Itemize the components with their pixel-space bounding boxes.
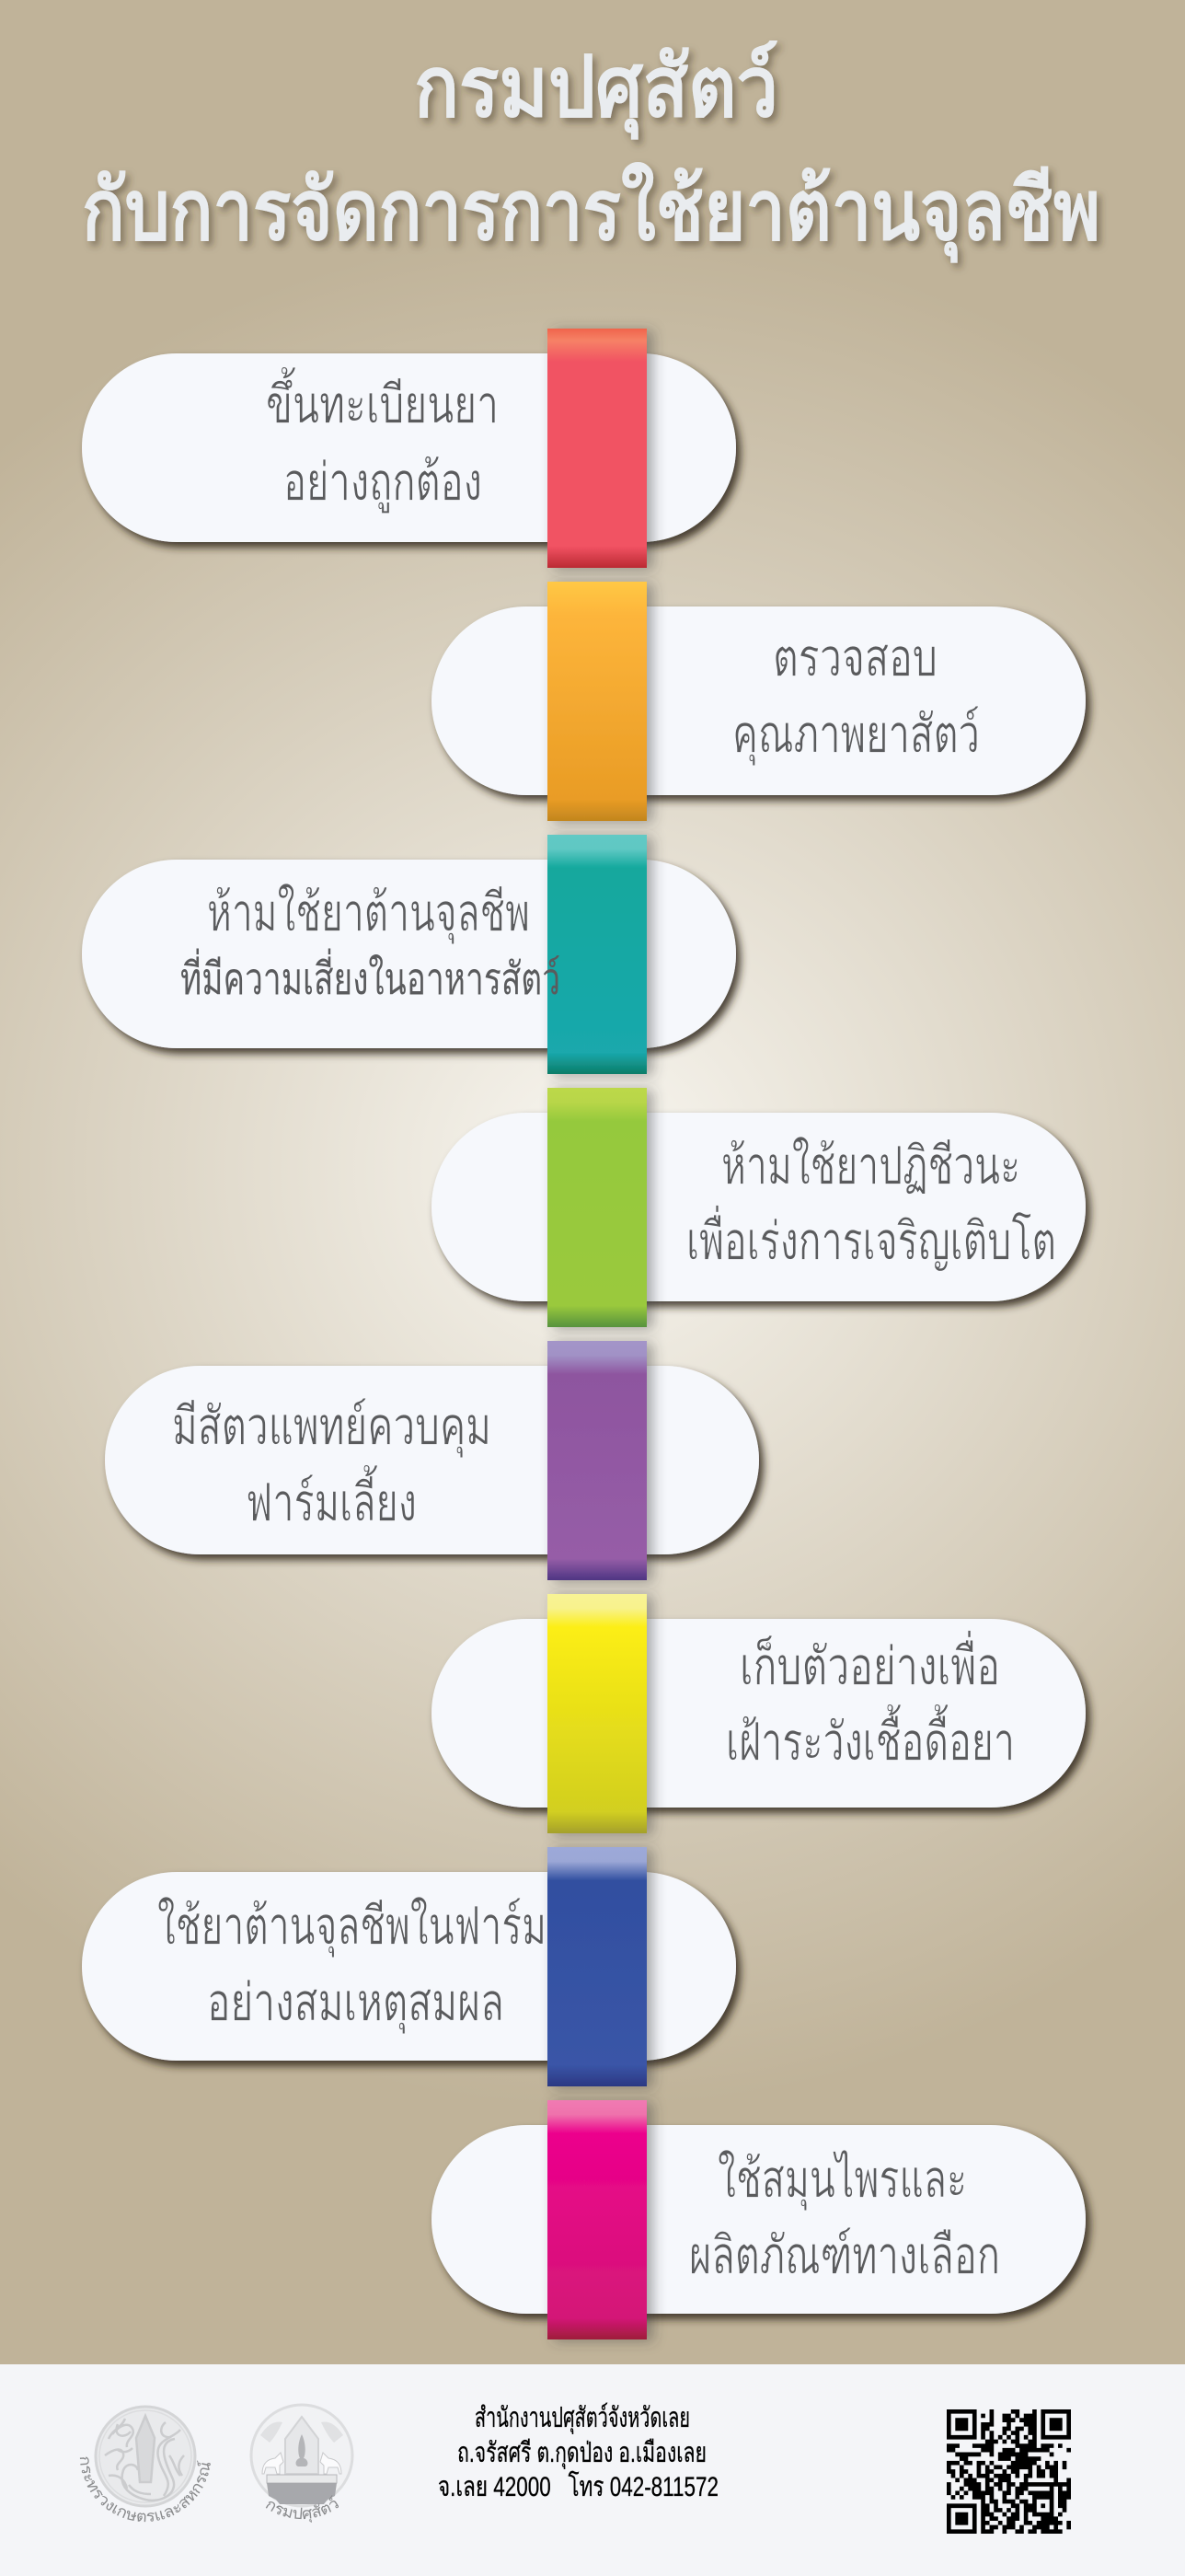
label 8: ใช้สมุนไพรและ — [718, 2149, 967, 2212]
QR code — [947, 2411, 1071, 2532]
colour bar 2 — [547, 582, 647, 821]
step 6: resistance surveillance — [431, 1594, 1086, 1833]
colour bar 4 — [547, 1088, 647, 1327]
title — [82, 40, 1100, 263]
label 6: เก็บตัวอย่างเพื่อ — [740, 1630, 1000, 1696]
footer panel — [0, 2364, 1185, 2576]
label 4: เพื่อเร่งการเจริญเติบโต — [686, 1205, 1056, 1271]
label 1 — [266, 367, 499, 514]
address text block: ถ.จรัสศรี ต.กุดป่อง อ.เมืองเลย — [457, 2438, 707, 2470]
colour bar 6 — [547, 1594, 647, 1833]
colour bar 3 — [547, 835, 647, 1074]
department name: กรมปศุสัตว์ — [265, 2495, 339, 2523]
address text block: จ.เลย 42000 โทร 042-811572 — [438, 2470, 719, 2502]
pill 8 — [431, 2125, 1086, 2314]
colour bar 7 — [547, 1847, 647, 2086]
address text block — [438, 2402, 719, 2502]
label 5: ฟาร์มเลี้ยง — [246, 1465, 417, 1532]
step 2: quality inspection — [431, 582, 1086, 821]
pill 5 — [105, 1366, 759, 1554]
label 3: ห้ามใช้ยาต้านจุลชีพ — [207, 883, 530, 945]
address text block: สำนักงานปศุสัตว์จังหวัดเลย — [475, 2402, 690, 2435]
label 7: ใช้ยาต้านจุลชีพในฟาร์ม — [157, 1896, 546, 1958]
step 5: veterinarian oversight — [105, 1341, 759, 1580]
pill 1 — [82, 353, 736, 542]
step 4: ban antibiotics as growth promoters — [431, 1088, 1086, 1327]
icon: department emblem — [250, 2404, 353, 2523]
label 3: ที่มีความเสี่ยงในอาหารสัตว์ — [180, 948, 560, 1004]
label 1: ขึ้นทะเบียนยา — [266, 367, 499, 434]
label 4: ห้ามใช้ยาปฏิชีวนะ — [721, 1136, 1020, 1196]
step 8: herbs and alternatives — [431, 2100, 1086, 2339]
label 2: ตรวจสอบ — [773, 629, 938, 687]
title line 1: กรมปศุสัตว์ — [414, 40, 778, 140]
label 1: อย่างถูกต้อง — [283, 453, 482, 514]
pill 4 — [431, 1113, 1086, 1301]
colour bar 8 — [547, 2100, 647, 2339]
colour bar 1 — [547, 329, 647, 568]
label 8 — [689, 2149, 1000, 2285]
colour bar 5 — [547, 1341, 647, 1580]
label 5: มีสัตวแพทย์ควบคุม — [172, 1397, 491, 1459]
label 4 — [686, 1136, 1056, 1271]
label 3 — [180, 883, 560, 1004]
label 2: คุณภาพยาสัตว์ — [732, 705, 980, 767]
pill 6 — [431, 1619, 1086, 1808]
icon: ministry emblem — [79, 2406, 211, 2522]
pill 3 — [82, 860, 736, 1048]
label 6 — [726, 1630, 1015, 1772]
label 5 — [172, 1397, 491, 1532]
label 7 — [157, 1896, 546, 2035]
label 2 — [732, 629, 980, 767]
pill 2 — [431, 606, 1086, 795]
ministry name: กระทรวงเกษตรและสหกรณ์ — [79, 2457, 211, 2522]
label 6: เฝ้าระวังเชื้อดื้อยา — [726, 1704, 1015, 1772]
pill 7 — [82, 1872, 736, 2061]
step 3: ban risky antimicrobials in feed — [82, 835, 736, 1074]
label 8: ผลิตภัณฑ์ทางเลือก — [689, 2226, 1000, 2285]
label 7: อย่างสมเหตุสมผล — [207, 1973, 504, 2035]
step 7: reasonable farm use — [82, 1847, 736, 2086]
step 1: drug registration — [82, 329, 736, 568]
